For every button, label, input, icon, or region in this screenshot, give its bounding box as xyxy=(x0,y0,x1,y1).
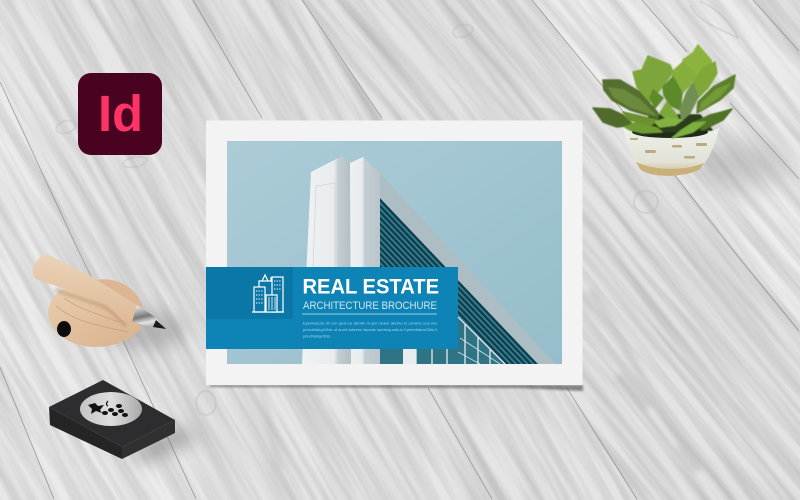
icon: Adobe InDesign logo xyxy=(78,73,162,155)
pot shadow xyxy=(688,143,788,187)
brochure xyxy=(206,120,584,392)
wooden holder back disc xyxy=(64,269,152,351)
disk cut-out symbol xyxy=(88,401,128,417)
lower glass panels with white frames xyxy=(380,317,505,364)
pencil barrel xyxy=(33,254,137,323)
cover photo: tower against sky xyxy=(227,141,562,364)
wooden holder front dome xyxy=(48,288,142,347)
body text xyxy=(303,322,437,338)
coaster shadow xyxy=(125,425,200,462)
metal disk xyxy=(80,392,142,426)
body text: princhilatquObis ut arunt laboren facode iumboquodius il prientiatusObis il xyxy=(303,328,437,332)
succulent leaves xyxy=(593,45,735,138)
coaster block xyxy=(49,380,175,447)
heading: REAL ESTATE xyxy=(302,274,439,298)
subheading: ARCHITECTURE BROCHURE xyxy=(303,300,437,312)
pencil on wooden holder xyxy=(33,254,187,351)
stone coaster xyxy=(49,380,200,462)
plant pot xyxy=(593,45,788,187)
pencil metal tip xyxy=(132,305,166,329)
icon: Adobe InDesign logo: Id xyxy=(98,85,143,142)
blue title band xyxy=(206,267,458,349)
icon: city buildings xyxy=(252,275,284,312)
pot body xyxy=(623,126,719,176)
barrel contact shadow xyxy=(55,290,126,326)
body text: princhilatquObis xyxy=(303,334,330,338)
holder shadow xyxy=(103,310,187,350)
brochure paper xyxy=(206,120,582,385)
body text: Eperlaecte dt cun ped eu denim in jes molor ateinu is umenc cus eiu xyxy=(303,322,437,326)
holder button xyxy=(57,321,71,337)
brochure shadow xyxy=(210,385,583,391)
